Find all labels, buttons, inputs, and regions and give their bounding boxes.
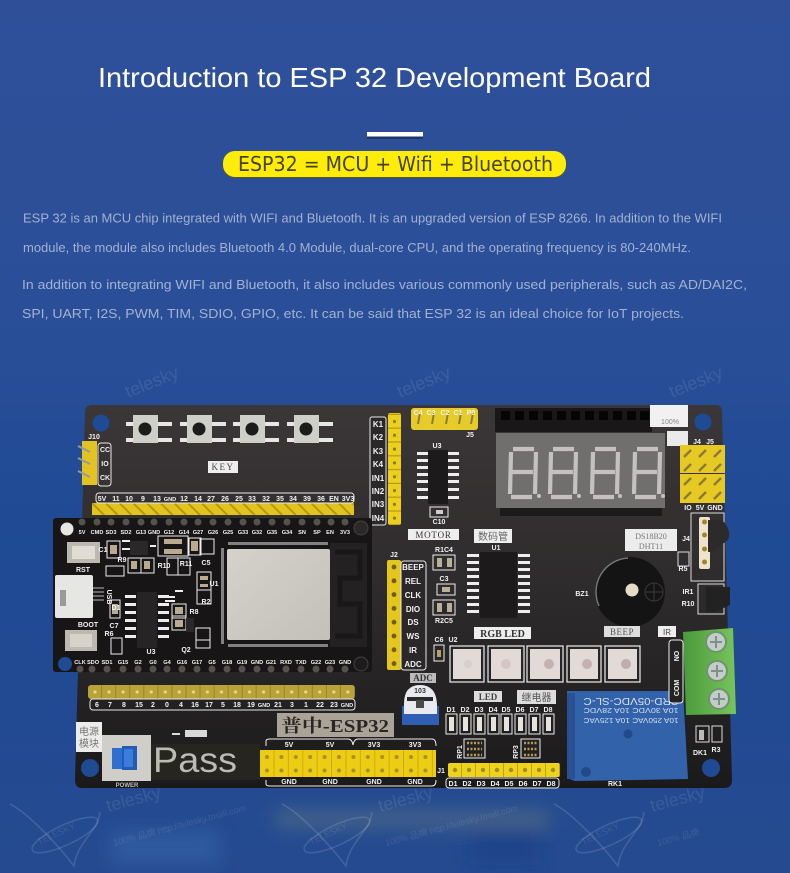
J1 LED header: D6 <box>519 781 528 788</box>
J5 header: C2 <box>441 410 450 417</box>
J1 LED header: D4 <box>491 781 500 788</box>
Pass caption: Pass <box>153 741 237 780</box>
J3 header with labels <box>370 413 401 525</box>
bottom pin labels: G19 <box>237 660 247 666</box>
P2 pin row: 3V3 <box>342 496 354 503</box>
watermarks: TELESKY <box>580 821 621 847</box>
power switch: POWER <box>116 783 139 789</box>
P2 pin row: 33 <box>248 496 256 503</box>
relay label: 继电器 <box>522 691 552 704</box>
upper right headers <box>680 439 725 512</box>
P bottom pin row: 7 <box>108 702 112 709</box>
BEEP and IR labels <box>604 626 676 637</box>
bottom pin labels: G18 <box>222 660 232 666</box>
small parts near U1: C3 <box>440 576 449 583</box>
P bottom pin row: 0 <box>165 702 169 709</box>
upper right headers: J5 <box>706 439 714 446</box>
divider bar <box>367 132 423 139</box>
SMD components: C1 <box>99 547 108 554</box>
power module label <box>76 722 102 752</box>
LED label <box>474 691 502 702</box>
sensor label: DS18B20 <box>635 532 667 541</box>
P2 pin row: 36 <box>317 496 325 503</box>
P bottom pin row: 15 <box>135 702 143 709</box>
top pin labels: G26 <box>208 530 218 536</box>
bottom pin labels: RXD <box>280 660 292 666</box>
J10 header: J10 <box>88 434 100 441</box>
circuit board <box>75 405 736 789</box>
power switch <box>102 735 151 789</box>
watermarks: telesky <box>666 362 725 402</box>
P bottom pin row: GND <box>341 703 353 709</box>
seven segment display <box>496 433 665 516</box>
top pin labels <box>79 530 350 536</box>
power header block <box>260 739 436 786</box>
top pin labels: GND <box>148 530 160 536</box>
top pin labels: SD2 <box>121 530 131 536</box>
small parts near U1: R2C5 <box>435 618 453 625</box>
P2 pin row: 26 <box>221 496 229 503</box>
J10 header <box>78 434 111 486</box>
power header block: 3V3 <box>368 742 380 749</box>
small parts near U1: R1C4 <box>435 547 453 554</box>
P bottom pin row: 22 <box>316 702 324 709</box>
J4 sensor connector <box>678 513 729 581</box>
description text: ESP 32 is an MCU chip integrated with WIFI and Bluetooth. It is an upgraded version of ESP 8266. In addition to the WIFI <box>23 210 722 226</box>
LED indicators D1-D8: D6 <box>516 707 525 714</box>
P2 pin row: EN <box>329 496 339 503</box>
P2 pin row: 9 <box>141 496 145 503</box>
LED indicators D1-D8: D2 <box>461 707 470 714</box>
bottom pin labels: CLK <box>74 660 86 666</box>
sensor label: DHT11 <box>639 542 663 551</box>
relay: 10A 30VDC 10A 28VDC <box>583 706 678 715</box>
J3 header with labels: K4 <box>373 460 384 469</box>
RGB LED label: RGB LED <box>480 629 525 640</box>
top pin labels: G25 <box>223 530 233 536</box>
RGB LEDs <box>450 646 640 682</box>
P bottom pin row: 3 <box>290 702 294 709</box>
power header block: 5V <box>326 742 335 749</box>
module pad rows <box>221 542 328 647</box>
top pin labels: G14 <box>179 530 190 536</box>
top pin labels: 5V <box>79 530 86 536</box>
green terminal block <box>669 628 736 715</box>
SMD components: R8 <box>190 609 199 616</box>
top pin labels: G13 <box>136 530 146 536</box>
upper right headers: J4 <box>693 439 701 446</box>
RGB LED label <box>474 627 531 640</box>
J2 header with labels: ADC <box>404 660 422 669</box>
small parts near U1: U2 <box>449 637 458 644</box>
J3 header with labels: IN4 <box>372 514 385 523</box>
P bottom pin row: 2 <box>151 702 155 709</box>
J2 header with labels: IR <box>409 646 417 655</box>
J2 header with labels: DIO <box>406 605 420 614</box>
watermarks: telesky <box>122 362 181 402</box>
resistor arrays: RP1 <box>457 745 464 759</box>
J1 LED header: D8 <box>547 781 556 788</box>
SMD components: Q2 <box>181 647 191 654</box>
U3 motor driver chip: C10 <box>433 519 446 526</box>
KEY label: KEY <box>212 462 234 472</box>
bottom pin labels: G23 <box>325 660 335 666</box>
P bottom pin row: 17 <box>205 702 213 709</box>
top pin labels: SD3 <box>106 530 116 536</box>
relay label <box>517 690 556 704</box>
J2 header with labels: WS <box>407 632 420 641</box>
IR receiver: R10 <box>682 601 695 608</box>
P bottom pin row: 1 <box>304 702 308 709</box>
upper right headers: IO <box>684 505 692 512</box>
MOTOR label: MOTOR <box>415 530 452 540</box>
P2 pin row: 10 <box>125 496 133 503</box>
P bottom pin row: 19 <box>247 702 255 709</box>
P bottom pin row: 5 <box>221 702 225 709</box>
watermarks: telesky <box>394 362 453 402</box>
DK1 and R3 parts: R3 <box>712 747 721 754</box>
description text <box>22 210 747 321</box>
watermarks: telesky <box>376 782 435 816</box>
J1 LED header: D5 <box>505 781 514 788</box>
P bottom pin row: 18 <box>233 702 241 709</box>
warranty stickers: 100% <box>661 419 679 426</box>
top pin labels: G34 <box>282 530 293 536</box>
SMD components: C5 <box>202 560 211 567</box>
bottom pin labels: SD1 <box>102 660 112 666</box>
bottom pin labels: G5 <box>208 660 216 666</box>
BOOT button: BOOT <box>78 622 99 629</box>
IR receiver: IR1 <box>683 589 694 596</box>
LED indicators D1-D8: D5 <box>502 707 511 714</box>
USB bridge chip: U3 <box>147 649 156 656</box>
micro USB port <box>55 575 112 618</box>
RST button <box>67 542 100 574</box>
resistor arrays <box>457 739 540 759</box>
small parts near U1 <box>433 547 458 661</box>
BEEP and IR labels: IR <box>663 628 671 637</box>
J1 LED header: D2 <box>463 781 472 788</box>
J5 header: C3 <box>427 410 436 417</box>
bottom pin labels: G21 <box>266 660 276 666</box>
subtitle pill: ESP32 = MCU + Wifi + Bluetooth <box>238 152 553 176</box>
watermarks: TELESKY <box>308 821 349 847</box>
SMD components <box>99 536 219 654</box>
watermarks: 100% 品牌 http://telesky.tmall.com <box>112 802 247 848</box>
bottom pin labels: G2 <box>134 660 142 666</box>
green terminal block: COM <box>674 680 681 696</box>
relay: SRD-05VDC-SL-C <box>584 695 678 706</box>
top pin labels: EN <box>326 530 334 536</box>
SMD components: U1 <box>210 581 219 588</box>
J5 header <box>411 408 478 439</box>
bottom pin labels: G15 <box>118 660 128 666</box>
description text: In addition to integrating WIFI and Bluetooth, it also includes various commonly used peripherals, such as AD/DAI2C, <box>22 277 747 292</box>
J10 header: CC <box>100 447 110 454</box>
bottom pin labels: G17 <box>192 660 202 666</box>
P2 pin row: 39 <box>303 496 311 503</box>
SMD components: D1 <box>112 605 121 612</box>
J5 header: J5 <box>466 432 474 439</box>
BOOT button <box>65 622 99 651</box>
P bottom pin row <box>88 685 355 710</box>
U3 motor driver chip: U3 <box>433 443 442 450</box>
top pin labels: SP <box>313 530 321 536</box>
power header block: GND <box>366 779 382 786</box>
J3 header with labels: K3 <box>373 447 384 456</box>
digital tube label <box>474 529 512 543</box>
P bottom pin row: 4 <box>179 702 183 709</box>
top pin labels: G33 <box>238 530 248 536</box>
BEEP and IR labels: BEEP <box>610 627 634 637</box>
LED indicators D1-D8: D4 <box>489 707 498 714</box>
USB bridge chip <box>125 592 169 656</box>
ADC potentiometer: ADC <box>413 673 433 683</box>
J10 header: IO <box>101 461 109 468</box>
J2 header with labels: DS <box>407 618 419 627</box>
P bottom pin row: 23 <box>330 702 338 709</box>
J1 LED header: D1 <box>449 781 458 788</box>
P1 socket <box>495 408 652 432</box>
LED label: LED <box>479 692 498 702</box>
P bottom pin row: 6 <box>95 702 99 709</box>
bottom pin labels: SDO <box>87 660 100 666</box>
buzzer <box>575 557 665 627</box>
title: Introduction to ESP 32 Development Board <box>98 62 651 93</box>
bottom pin labels: G0 <box>149 660 157 666</box>
power header block: GND <box>322 779 338 786</box>
top pin labels: G27 <box>193 530 203 536</box>
power module label: 电源 <box>79 725 99 738</box>
LED indicators D1-D8: D8 <box>544 707 553 714</box>
power header block: GND <box>407 779 423 786</box>
bottom pin labels: GND <box>251 660 263 666</box>
watermarks: TELESKY <box>36 821 77 847</box>
digital tube label: 数码管 <box>478 530 508 543</box>
P2 pin row: 34 <box>289 496 297 503</box>
bottom pin labels: GND <box>339 660 351 666</box>
U1 LED driver chip: U1 <box>492 545 501 552</box>
P bottom pin row: 8 <box>122 702 126 709</box>
small SMD part near power <box>172 730 207 737</box>
P2 pin row: 13 <box>153 496 161 503</box>
MOTOR label <box>408 529 459 540</box>
P bottom pin row: 16 <box>191 702 199 709</box>
J3 header with labels: IN1 <box>372 474 385 483</box>
J1 LED header: J1 <box>437 768 445 775</box>
top pin labels: G32 <box>252 530 262 536</box>
top pin labels: CMD <box>91 530 103 536</box>
WROOM shield can <box>227 549 330 640</box>
P bottom pin row: GND <box>258 703 270 709</box>
P2 pin row <box>92 493 354 515</box>
sensor label <box>625 529 677 551</box>
P2 pin row: 27 <box>207 496 215 503</box>
upper right headers: 5V <box>696 505 705 512</box>
LED indicators D1-D8: D7 <box>530 707 539 714</box>
P2 pin row: 32 <box>262 496 270 503</box>
top pin labels: G12 <box>164 530 174 536</box>
watermarks <box>10 362 725 866</box>
bottom pin labels: G22 <box>311 660 321 666</box>
J1 LED header: D3 <box>477 781 486 788</box>
micro USB port: USB <box>105 590 112 604</box>
P2 pin row: 14 <box>194 496 202 503</box>
P2 pin row: 25 <box>235 496 243 503</box>
J2 header with labels: CLK <box>405 591 421 600</box>
J3 header with labels: IN3 <box>372 500 385 509</box>
upper right headers: GND <box>707 505 723 512</box>
small parts near U1: C6 <box>435 637 444 644</box>
tactile keys <box>126 415 333 443</box>
SMD components: R10 <box>158 563 171 570</box>
J2 header with labels: J2 <box>390 552 398 559</box>
SMD components: R9 <box>118 557 127 564</box>
J2 header with labels: REL <box>405 577 421 586</box>
DK1 and R3 parts: DK1 <box>693 750 707 757</box>
P bottom pin row: 21 <box>274 702 282 709</box>
ADC potentiometer: 103 <box>414 688 426 695</box>
buzzer: BZ1 <box>575 591 589 598</box>
resistor arrays: RP3 <box>513 745 520 759</box>
top pin labels: SN <box>298 530 306 536</box>
J4 sensor connector: J4 <box>682 536 690 543</box>
J1 LED header: D7 <box>533 781 542 788</box>
bottom pin labels: TXD <box>295 660 307 666</box>
J1 LED header <box>437 763 560 788</box>
board name label: 普中-ESP32 <box>281 716 389 736</box>
module holes <box>58 521 368 671</box>
DK1 and R3 parts <box>693 726 722 757</box>
SMD components: C7 <box>110 623 119 630</box>
green terminal block: NO <box>674 650 681 661</box>
J2 header with labels <box>387 552 426 670</box>
J3 header with labels: K1 <box>373 420 384 429</box>
relay: 10A 250VAC 10A 125VAC <box>583 716 678 725</box>
bottom pads <box>76 666 348 672</box>
watermarks: 100% 品牌 <box>656 826 701 848</box>
bottom pin labels: G4 <box>163 660 172 666</box>
watermarks: telesky <box>648 782 707 816</box>
SMD components: R11 <box>180 561 192 568</box>
LED indicators D1-D8 <box>446 707 554 734</box>
J2 header with labels: BEEP <box>402 563 425 572</box>
RST button: RST <box>76 567 91 574</box>
J5 header: C4 <box>414 410 423 417</box>
relay: RK1 <box>608 781 622 788</box>
blurred background patches <box>110 810 550 865</box>
bottom pin labels <box>74 660 351 666</box>
ESP32 core module <box>53 518 372 672</box>
LED indicators D1-D8: D1 <box>447 707 456 714</box>
P2 pin row: 12 <box>180 496 188 503</box>
J3 header with labels: K2 <box>373 433 384 442</box>
J10 header: CK <box>100 475 110 482</box>
KEY label <box>208 461 238 473</box>
P2 pin row: GND <box>164 497 176 503</box>
J4 sensor connector: R5 <box>679 566 688 573</box>
P2 pin row: 35 <box>276 496 284 503</box>
P2 pin row: 5V <box>98 496 107 503</box>
antenna area <box>330 543 367 647</box>
J5 header: P0 <box>467 410 475 417</box>
top pads <box>78 518 348 526</box>
SMD components: R2 <box>202 599 211 606</box>
warranty stickers <box>650 405 688 446</box>
J5 header: C1 <box>454 410 463 417</box>
IR receiver <box>682 584 730 614</box>
relay <box>567 691 688 788</box>
ADC potentiometer <box>402 673 439 725</box>
watermarks: telesky <box>104 782 163 816</box>
top pin labels: G35 <box>267 530 277 536</box>
watermarks: 100% 品牌 http://telesky.tmall.com <box>384 802 519 848</box>
mounting holes <box>81 414 720 777</box>
power header block: GND <box>281 779 297 786</box>
power header block: 3V3 <box>409 742 421 749</box>
power header block: 5V <box>285 742 294 749</box>
top pin labels: 3V3 <box>340 530 350 536</box>
U1 LED driver chip <box>467 545 530 618</box>
P2 pin row: 11 <box>112 496 120 503</box>
bottom pin labels: G16 <box>177 660 187 666</box>
SMD components: R6 <box>105 631 114 638</box>
board name label <box>277 713 394 737</box>
U3 motor driver chip <box>417 443 459 526</box>
J3 header with labels: IN2 <box>372 487 385 496</box>
LED indicators D1-D8: D3 <box>475 707 484 714</box>
power module label: 模块 <box>79 738 99 750</box>
description text: SPI, UART, I2S, PWM, TIM, SDIO, GPIO, etc. It can be said that ESP 32 is an ideal choice for IoT projects. <box>22 306 684 321</box>
description text: module, the module also includes Bluetooth 4.0 Module, dual-core CPU, and the operating frequency is 80-240MHz. <box>23 240 691 255</box>
